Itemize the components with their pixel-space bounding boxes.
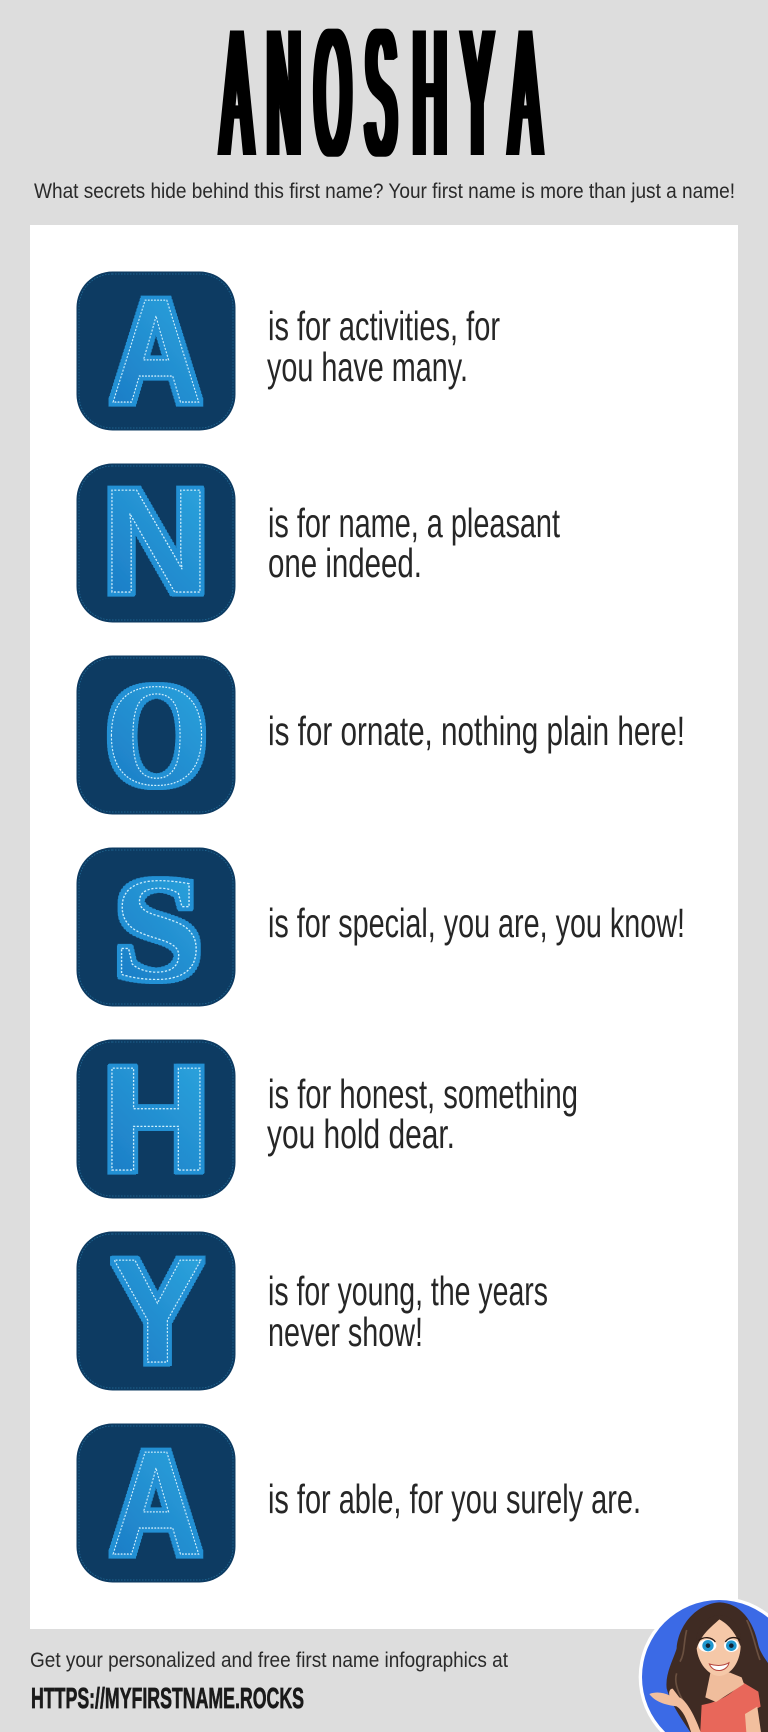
icon: letter S: S [113,847,203,1010]
text: N line: is for name, a pleasant [268,500,560,546]
icon: letter Y: Y [112,1229,203,1394]
text: H line: is for honest, something [268,1071,578,1117]
text: Y line: never show! [268,1309,423,1355]
icon: letter H: H [102,1037,210,1202]
icon: letter H [76,1037,236,1202]
icon: letter N: N [102,459,210,624]
icon: letter A: A [110,269,202,434]
icon: letter O: O [105,653,208,816]
text: A line [267,303,500,390]
icon: letter S [76,847,236,1010]
text: A line: you have many. [267,344,468,390]
icon: letter A: A [110,1421,202,1586]
icon: letter N [76,459,236,624]
text: Y line [268,1268,548,1355]
text: N line [268,500,560,586]
icon: letter A [76,269,236,434]
panel: letters [30,225,738,1629]
icon: avatar of a woman in a blue circle [639,1597,768,1732]
icon: letter Y [76,1229,236,1394]
text: H line: you hold dear. [267,1111,455,1157]
text: H line [267,1071,578,1157]
text: Y line: is for young, the years [268,1268,548,1314]
text: A line: is for activities, for [268,303,500,349]
footer url: HTTPS://MYFIRSTNAME.ROCKS [31,1683,304,1715]
footer text: Get your personalized and free first name infographics at [30,1649,508,1672]
icon: letter A [76,1421,236,1586]
text: N line: one indeed. [268,540,422,586]
